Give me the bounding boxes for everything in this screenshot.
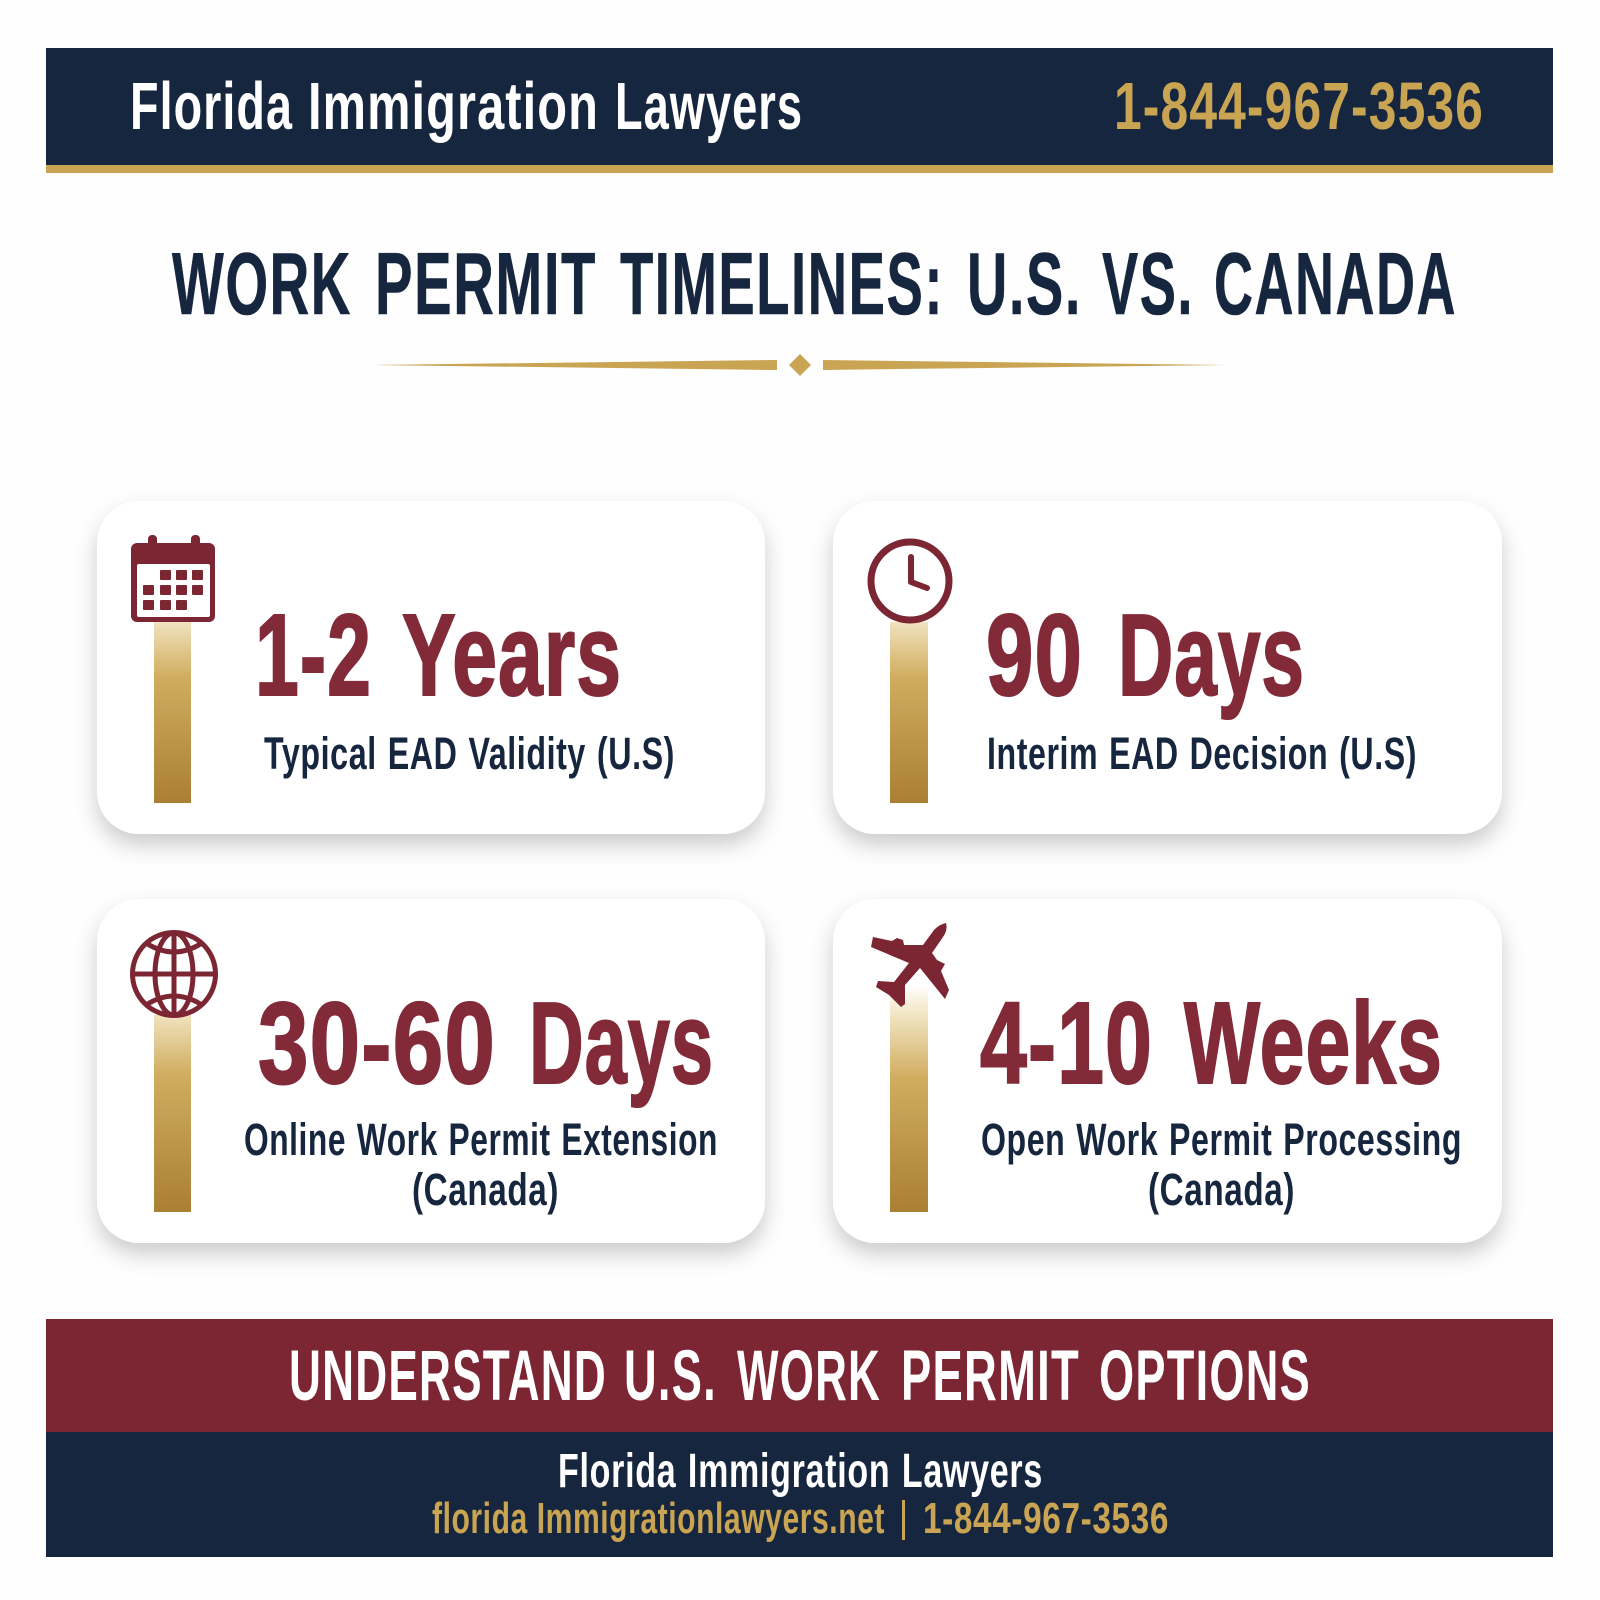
header phone number: 1-844-967-3536 <box>1114 69 1484 144</box>
stat value: 30-60 <box>258 978 496 1108</box>
stat description <box>244 1114 718 1215</box>
stat value <box>980 978 1443 1108</box>
footer website: florida Immigrationlawyers.net <box>432 1494 885 1543</box>
footer phone number: 1-844-967-3536 <box>923 1494 1169 1543</box>
title: VS. <box>1102 234 1194 333</box>
title <box>172 234 1457 333</box>
stat value: 4-10 <box>980 978 1153 1108</box>
stat description: (Canada) <box>1148 1164 1295 1215</box>
stat value: Days <box>529 978 714 1108</box>
header firm name: Immigration <box>308 69 599 144</box>
stat value <box>258 978 714 1108</box>
panel: 90 days <box>833 501 1502 834</box>
panel: 1-2 years <box>97 501 765 834</box>
icon: calendar <box>131 535 215 622</box>
timeline bar <box>890 988 928 1212</box>
title: CANADA <box>1214 234 1457 333</box>
icon: globe <box>132 932 216 1016</box>
call to action heading: U.S. <box>624 1337 717 1416</box>
call to action heading: WORK <box>737 1337 881 1416</box>
footer separator <box>902 1500 905 1540</box>
stat value <box>255 590 622 720</box>
header firm name: Florida <box>130 69 293 144</box>
call to action band <box>46 1319 1553 1432</box>
title: PERMIT <box>375 234 597 333</box>
call to action heading: PERMIT <box>901 1337 1080 1416</box>
timeline bar <box>154 622 191 803</box>
title: TIMELINES: <box>620 234 944 333</box>
call to action heading: UNDERSTAND <box>289 1337 607 1416</box>
header firm name: Lawyers <box>615 69 803 144</box>
stat value: Years <box>402 590 622 720</box>
panel: 4-10 weeks <box>833 899 1502 1243</box>
stat value <box>986 590 1305 720</box>
call to action heading <box>289 1337 1311 1416</box>
icon: clock <box>871 542 949 620</box>
header band <box>46 48 1553 173</box>
timeline bar <box>890 622 928 803</box>
call to action heading: OPTIONS <box>1099 1337 1311 1416</box>
header firm name <box>130 69 803 144</box>
stat description: (Canada) <box>412 1164 559 1215</box>
panel: 30-60 days <box>97 899 765 1243</box>
stat value: 1-2 <box>255 590 372 720</box>
stat description: Interim EAD Decision (U.S) <box>987 728 1417 779</box>
footer band <box>46 1432 1553 1557</box>
title divider with diamond <box>372 354 1227 376</box>
timeline bar <box>154 1015 191 1212</box>
footer firm name: Florida Immigration Lawyers <box>558 1445 1043 1498</box>
title: U.S. <box>967 234 1082 333</box>
stat description <box>981 1114 1462 1215</box>
title: WORK <box>172 234 352 333</box>
icon: airplane <box>871 923 949 1007</box>
stat value: Weeks <box>1184 978 1443 1108</box>
stat description: Online Work Permit Extension <box>244 1114 718 1165</box>
stat description: Typical EAD Validity (U.S) <box>264 728 675 779</box>
stat value: Days <box>1118 590 1305 720</box>
stat value: 90 <box>986 590 1083 720</box>
